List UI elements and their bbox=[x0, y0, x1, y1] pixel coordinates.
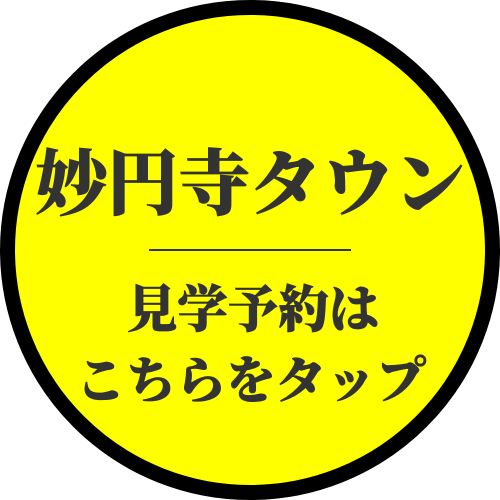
text: line one: 見学予約は bbox=[127, 282, 379, 338]
text: line two: こちらをタップ bbox=[76, 353, 426, 409]
title: 妙円寺タウン bbox=[35, 146, 464, 225]
divider line bbox=[149, 249, 351, 251]
